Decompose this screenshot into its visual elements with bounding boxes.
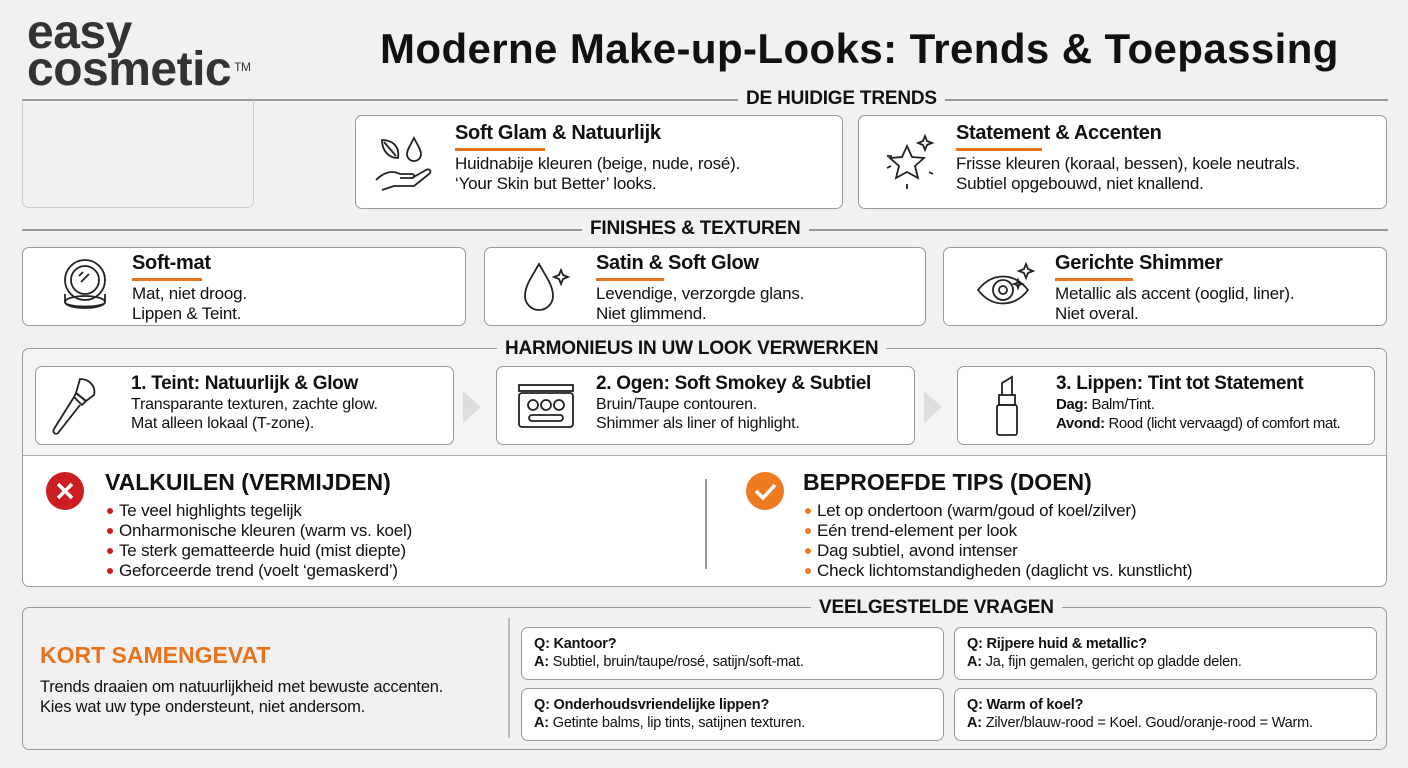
card: soft-mat: Lippen & Teint. [132,304,241,323]
heading: de huidige trends: DE HUIDIGE TRENDS [746,88,937,109]
card: shimmer: Niet overal. [1055,304,1139,323]
faq 4: Q: Warm of koel? [967,697,1083,713]
heading: finishes: FINISHES & TEXTUREN [590,218,800,239]
logo [27,6,250,96]
card: soft-mat: Mat, niet droog. [132,284,247,303]
tips [746,469,1192,580]
card: soft-mat [22,247,466,326]
step 1: Transparante texturen, zachte glow. [131,396,378,413]
title: Moderne Make-up-Looks: Trends & Toepassing [380,25,1339,72]
step 3: Avond: Rood (licht vervaagd) of comfort mat. [1056,415,1340,432]
logo: cosmeticTM [27,43,250,96]
arrow [463,391,481,423]
step 3: 3. Lippen: Tint tot Statement [1056,373,1303,394]
step 1: 1. Teint: Natuurlijk & Glow [131,373,358,394]
card: satin: Levendige, verzorgde glans. [596,284,804,303]
logo: easy [27,6,132,59]
icon: x [46,472,84,510]
icon: star [886,134,934,189]
card: statement [858,115,1387,209]
tips: Dag subtiel, avond intenser [817,541,1018,560]
icon: lipstick [996,375,1018,436]
card: shimmer: Gerichte Shimmer [1055,252,1222,274]
valkuilen: Te sterk gematteerde huid (mist diepte) [119,541,406,560]
faq 2: Q: Rijpere huid & metallic? [967,636,1147,652]
step 1: Mat alleen lokaal (T-zone). [131,415,314,432]
icon: brush [52,378,96,435]
summary: Trends draaien om natuurlijkheid met bewuste accenten. [40,678,443,696]
panel: harmonieus [22,348,1387,587]
faq 3: Q: Onderhoudsvriendelijke lippen? [534,697,769,713]
valkuilen [46,469,412,580]
faq 3 [521,688,944,741]
icon: check [746,472,784,510]
valkuilen: Te veel highlights tegelijk [119,501,302,520]
summary [40,642,443,716]
card: shimmer: Metallic als accent (ooglid, liner). [1055,284,1294,303]
card: shimmer [943,247,1387,326]
icon: drop [524,262,570,311]
faq 1 [521,627,944,680]
faq 1: A: Subtiel, bruin/taupe/rosé, satijn/soft-mat. [534,654,804,670]
icon: compact [64,259,106,309]
card: soft glam: Soft Glam & Natuurlijk [455,122,661,144]
step 2 [496,366,915,445]
card: satin: Niet glimmend. [596,304,707,323]
step 2: Bruin/Taupe contouren. [596,396,757,413]
card: satin [484,247,926,326]
step 3: Dag: Balm/Tint. [1056,396,1154,413]
faq 3: A: Getinte balms, lip tints, satijnen texturen. [534,715,805,731]
empty left box [22,100,254,208]
tips: Let op ondertoon (warm/goud of koel/zilver) [817,501,1136,520]
tips: Eén trend-element per look [817,521,1017,540]
valkuilen: Onharmonische kleuren (warm vs. koel) [119,521,412,540]
faq 2: A: Ja, fijn gemalen, gericht op gladde delen. [967,654,1242,670]
faq 4 [954,688,1377,741]
faq 4: A: Zilver/blauw-rood = Koel. Goud/oranje-rood = Warm. [967,715,1313,731]
faq 1: Q: Kantoor? [534,636,616,652]
step 1 [35,366,454,445]
tips: Check lichtomstandigheden (daglicht vs. kunstlicht) [817,561,1192,580]
panel: faq [22,607,1387,750]
arrow [924,391,942,423]
card: statement: Subtiel opgebouwd, niet knallend. [956,174,1204,193]
heading: faq: VEELGESTELDE VRAGEN [819,597,1054,618]
icon: eye [976,262,1036,304]
valkuilen: Geforceerde trend (voelt ‘gemaskerd’) [119,561,398,580]
card: statement: Frisse kleuren (koraal, bessen), koele neutrals. [956,154,1300,173]
card: soft glam: ‘Your Skin but Better’ looks. [455,174,656,193]
card: soft glam: Huidnabije kleuren (beige, nude, rosé). [455,154,740,173]
tips: BEPROEFDE TIPS (DOEN) [803,469,1092,495]
heading: harmonieus: HARMONIEUS IN UW LOOK VERWERKEN [505,338,878,359]
faq 2 [954,627,1377,680]
icon: palette [518,384,574,428]
summary: Kies wat uw type ondersteunt, niet andersom. [40,698,365,716]
summary: KORT SAMENGEVAT [40,642,270,668]
card: soft glam [355,115,843,209]
card: satin: Satin & Soft Glow [596,252,759,274]
icon: leaf hand [375,136,432,191]
valkuilen: VALKUILEN (VERMIJDEN) [105,469,391,495]
step 2: 2. Ogen: Soft Smokey & Subtiel [596,373,871,394]
card: soft-mat: Soft-mat [132,252,211,274]
step 3 [957,366,1375,445]
card: statement: Statement & Accenten [956,122,1162,144]
step 2: Shimmer als liner of highlight. [596,415,800,432]
